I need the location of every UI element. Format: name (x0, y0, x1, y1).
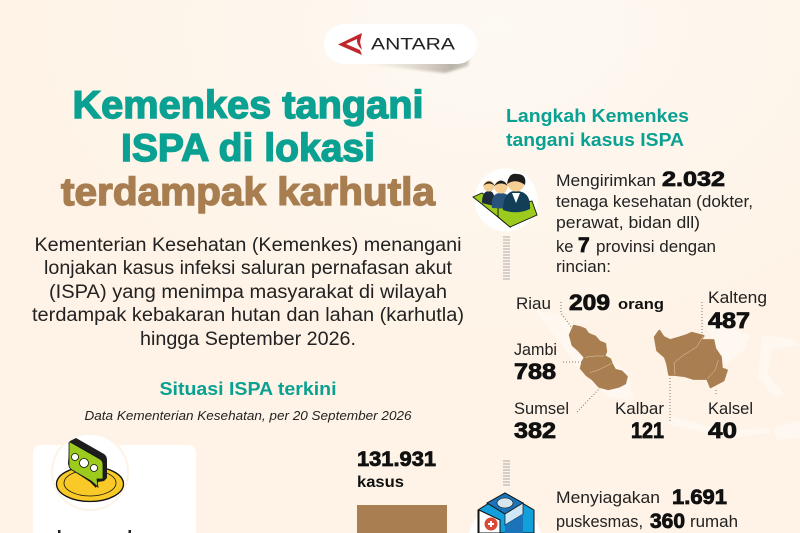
step 2 text: 1.691 (672, 485, 727, 509)
map: Indonesia background (535, 310, 800, 440)
map labels (514, 288, 767, 443)
step 1 text: 2.032 (662, 167, 725, 191)
case count label: kasus (357, 474, 404, 491)
step 1 text: rincian: (556, 258, 611, 276)
map labels: Kalteng (708, 288, 767, 307)
case count label (357, 447, 436, 491)
step 1 text: perawat, bidan dll) (556, 214, 700, 232)
map labels: 382 (514, 418, 556, 443)
map: Kalimantan provinces (655, 331, 727, 387)
step 2 text: rumah (690, 513, 738, 531)
panel: card (33, 445, 196, 533)
right heading: Langkah Kemenkes (506, 105, 689, 126)
map labels: Kalbar (615, 399, 664, 418)
map labels: orang (618, 296, 664, 313)
map labels: 788 (514, 359, 556, 384)
intro paragraph: (ISPA) yang menimpa masyarakat di wilayah (49, 282, 447, 303)
section heading: Situasi ISPA terkini: Situasi ISPA terkini (160, 379, 336, 399)
map labels: 209 (569, 290, 610, 315)
icon: health workers (473, 168, 538, 232)
case count label: 131.931 (357, 447, 436, 471)
icon: chat bubble on plate (52, 434, 128, 510)
step 1 text: tenaga kesehatan (dokter, (556, 193, 753, 211)
map labels: Kalsel (708, 399, 753, 418)
intro paragraph: lonjakan kasus infeksi saluran pernafasan akut (44, 258, 453, 279)
intro paragraph: hingga September 2026. (140, 329, 356, 350)
step 2 text: 360 (650, 509, 685, 533)
title: ISPA di lokasi (121, 127, 375, 170)
bar chart: case bar (357, 505, 447, 533)
icon: hospital building (469, 493, 541, 533)
step 1 text: 7 (578, 234, 590, 257)
title: terdampak karhutla (61, 171, 435, 214)
step 1 text: ke (556, 238, 573, 256)
intro paragraph: Kementerian Kesehatan (Kemenkes) menangani (34, 235, 462, 256)
data source note: Data Kementerian Kesehatan, per 20 September 2026 (84, 408, 412, 423)
step 1 text: provinsi dengan (596, 238, 716, 256)
step 2 text: Menyiagakan (556, 489, 660, 507)
map labels: 487 (708, 308, 750, 333)
logo: ANTARA (324, 24, 477, 73)
step 2 text (556, 485, 738, 533)
step 1 text (556, 167, 753, 276)
title: Kemenkes tangani (72, 84, 424, 127)
step 2 text: puskesmas, (556, 513, 643, 531)
intro paragraph: terdampak kebakaran hutan dan lahan (karhutla) (32, 305, 464, 326)
connector: ladder dots (503, 237, 510, 485)
map: leader dots (561, 302, 716, 421)
map labels: 40 (708, 418, 737, 443)
map labels: Sumsel (514, 399, 569, 418)
step 1 text: Mengirimkan (556, 172, 656, 190)
logo: ANTARA: ANTARA (371, 34, 456, 54)
map: Sumatra provinces (570, 326, 627, 389)
map labels: Jambi (514, 340, 557, 359)
right heading (506, 105, 689, 150)
title (61, 84, 435, 214)
map labels: 121 (631, 418, 664, 443)
map labels: Riau (516, 294, 551, 313)
intro paragraph (32, 235, 464, 350)
right heading: tangani kasus ISPA (506, 129, 684, 150)
